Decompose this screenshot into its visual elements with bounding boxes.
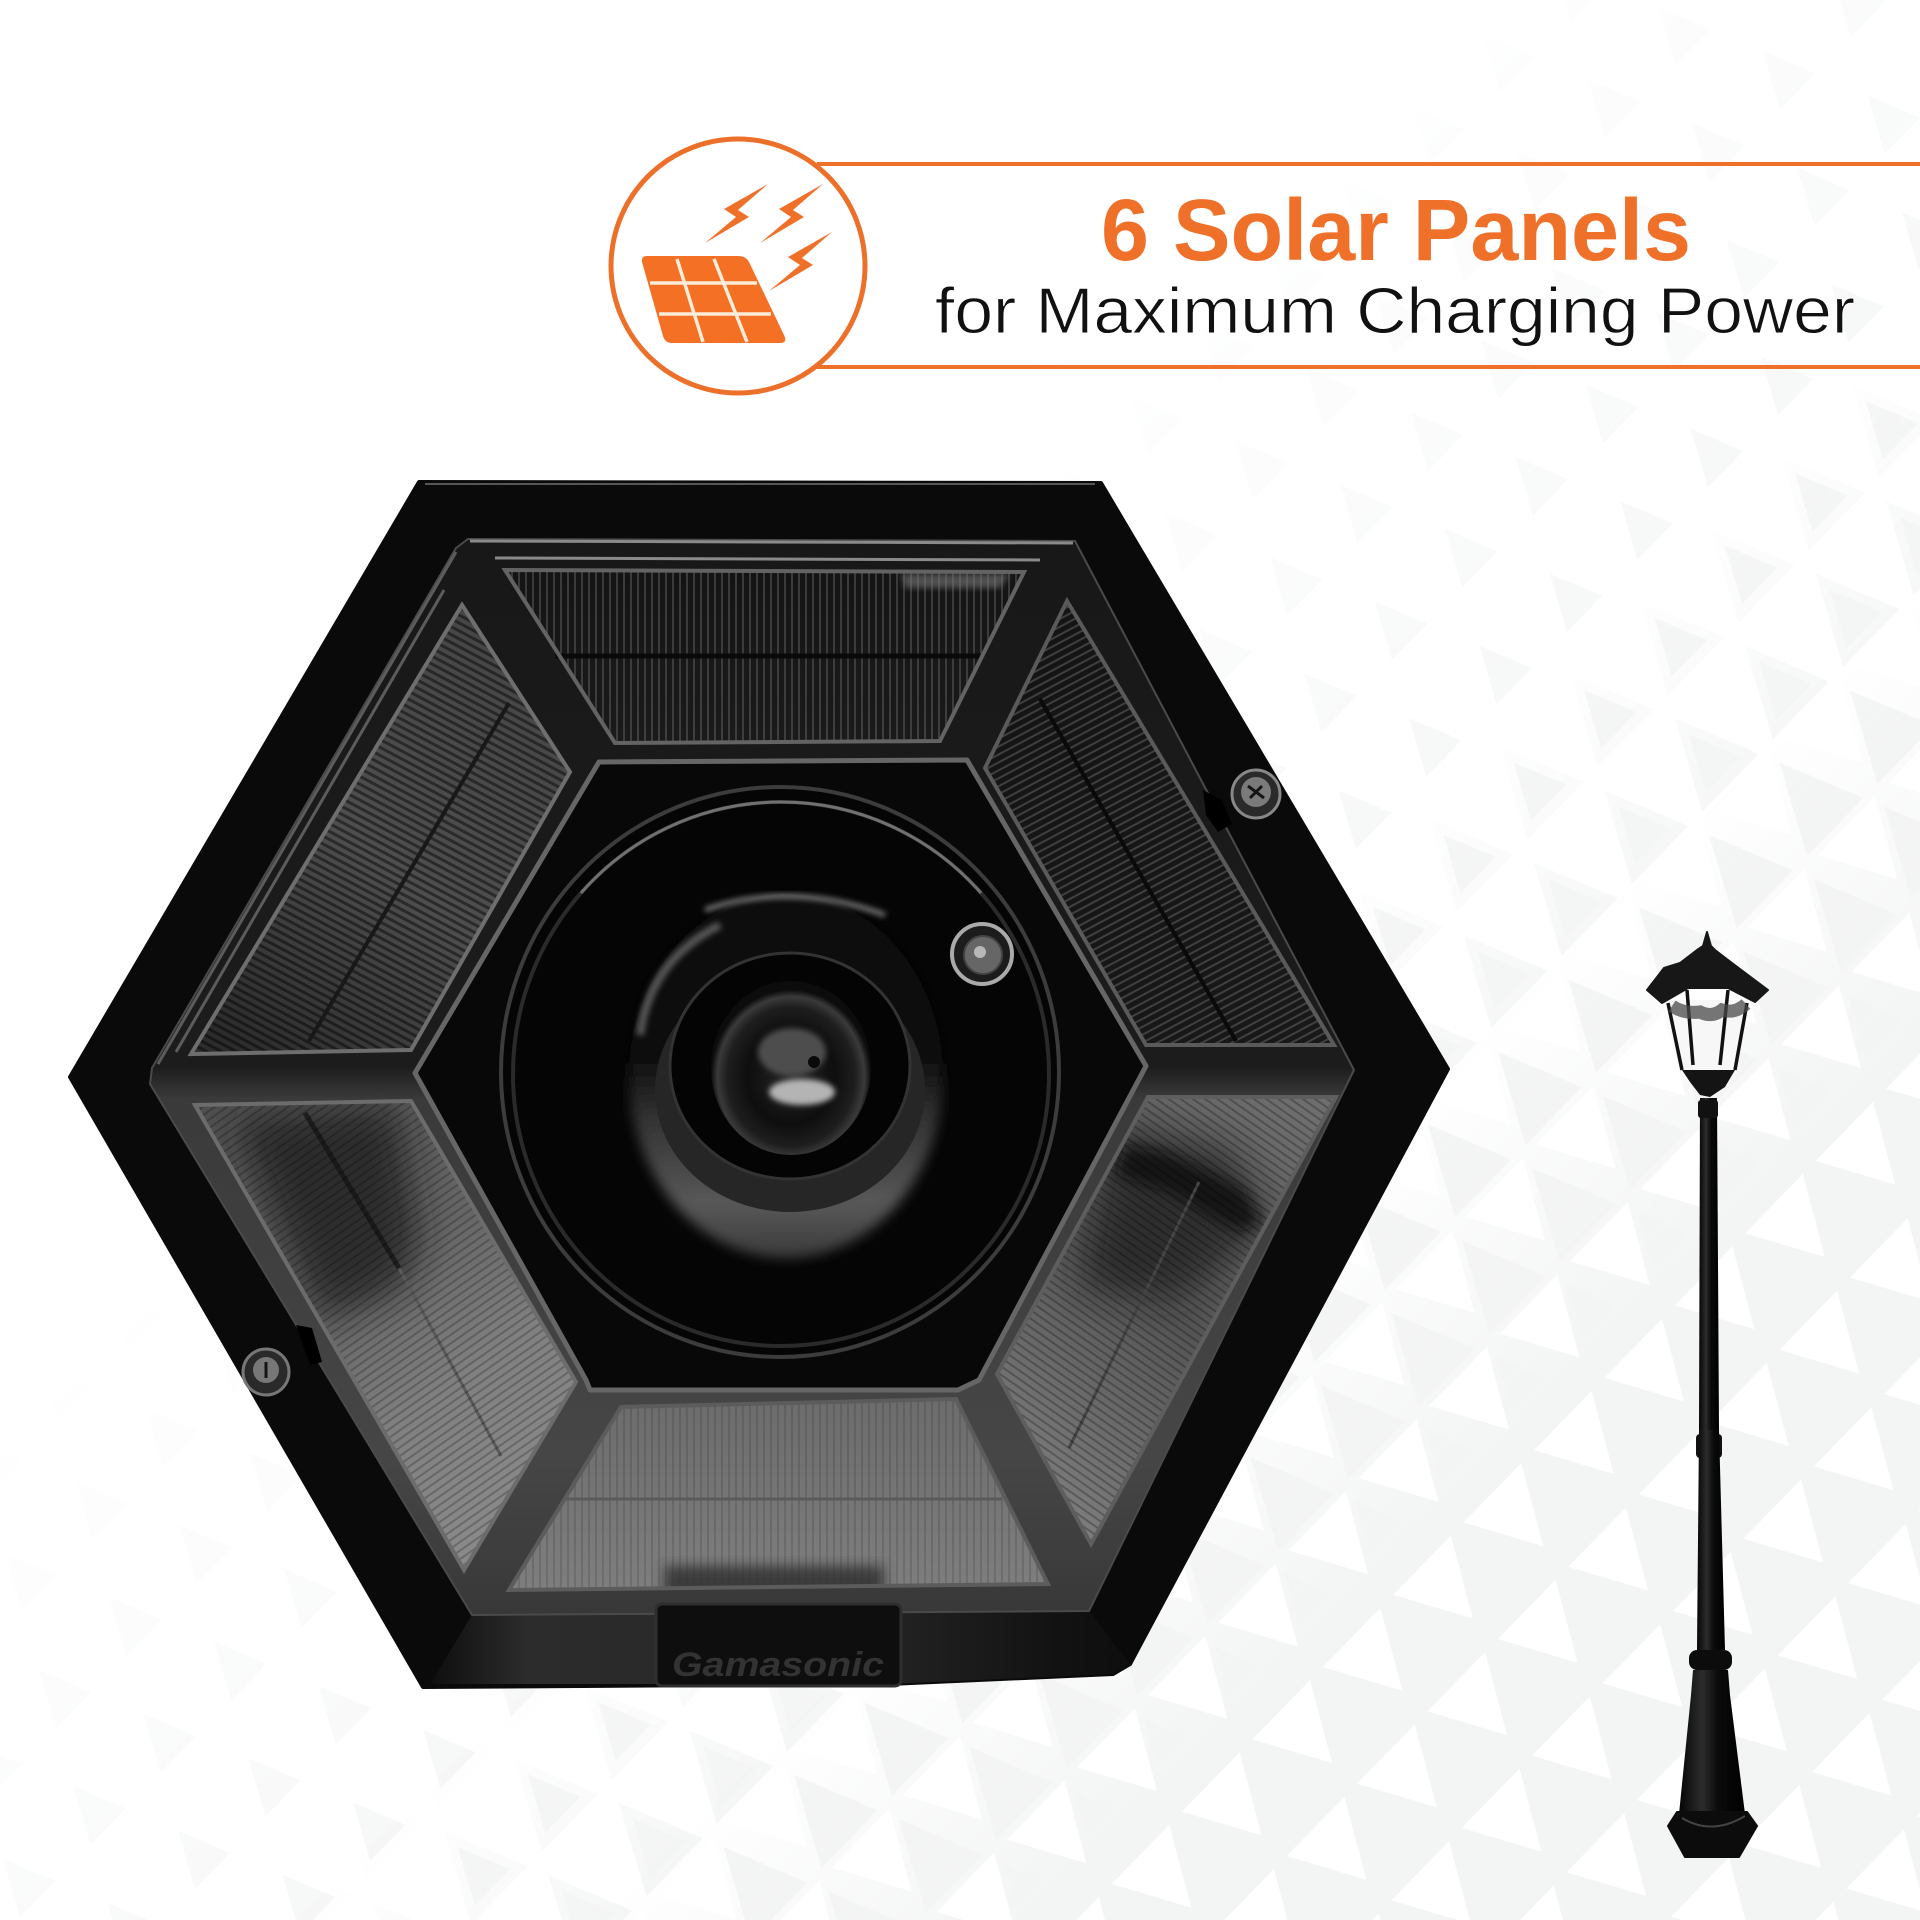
pole ring [1689,1650,1732,1670]
header banner [611,139,1920,393]
light sensor [952,924,1012,984]
screw right [1203,770,1280,832]
solar panel: bottom [509,1399,1048,1598]
solar panel: upper right [985,601,1334,1045]
background triangle pattern [293,402,1920,1920]
pole base [1679,1670,1745,1814]
solar panel: lower right [997,1097,1336,1544]
product photo: hexagonal solar lamp top [70,482,1448,1687]
lamp post photo [1647,932,1768,1857]
solar panel: upper left [191,605,570,1054]
bottom band [430,1611,1130,1684]
subheading: for Maximum Charging Power [935,274,1855,347]
centre ring [501,787,1059,1357]
centre lens [670,953,910,1179]
icon: solar panel with lightning bolts in circle [611,139,865,393]
pole collar [1696,1434,1722,1458]
centre hexagon [415,760,1146,1390]
body top edge highlight [425,483,1095,485]
lamp top body [70,482,1448,1687]
solar panel: lower left [195,1101,576,1570]
heading: 6 Solar Panels [1101,182,1691,279]
pole [1699,1098,1719,1430]
inner frame [150,539,1354,1615]
screw left [243,1325,322,1395]
solar panel: top [505,570,1024,743]
lantern [1647,932,1768,1097]
centre dome [629,894,943,1258]
brand tab [656,1604,901,1686]
banner top rule [817,162,1920,166]
upper-left frame highlights [158,552,456,1064]
banner bottom rule [817,365,1920,369]
brand tab: Gamasonic [672,1646,884,1684]
top frame highlights [470,541,1073,560]
